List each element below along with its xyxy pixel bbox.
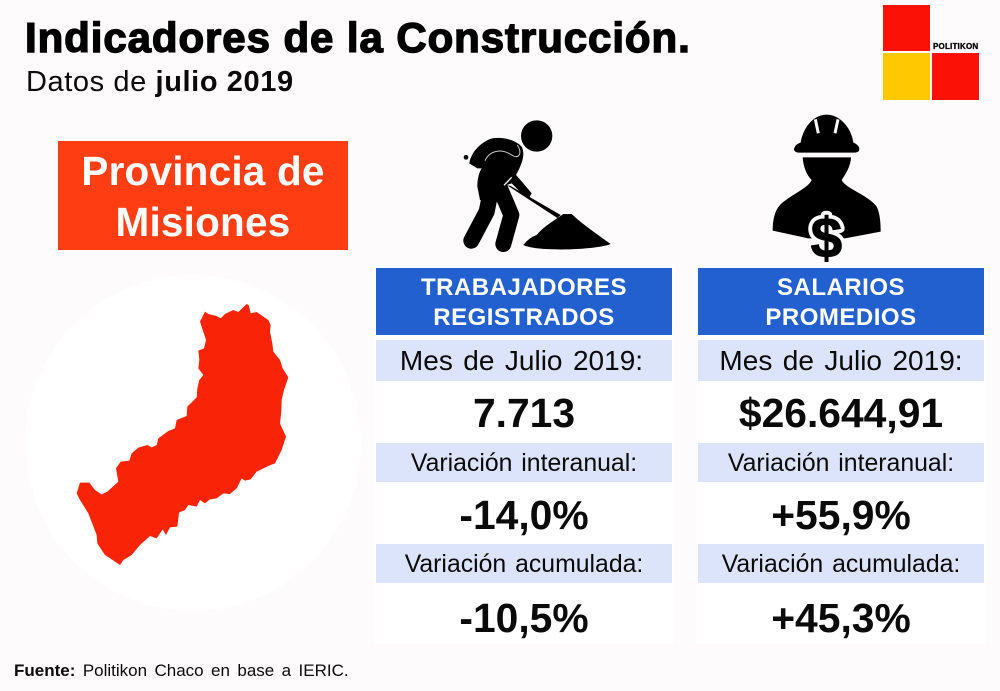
icon: worker shoveling <box>463 120 610 252</box>
panel: salarios promedios <box>698 268 984 642</box>
icon: dollar sign: $ <box>811 207 842 270</box>
label: acumulada <box>376 544 672 583</box>
title: Indicadores de la Construcción. <box>25 14 691 61</box>
label: mes: Mes de Julio 2019: <box>719 345 963 376</box>
province label: Provincia de <box>81 148 325 194</box>
icon: dollar sign: $ <box>811 207 842 270</box>
label: mes <box>376 340 672 381</box>
map: Misiones <box>77 304 288 565</box>
label: acumulada: Variación acumulada: <box>405 551 643 578</box>
label: mes: Mes de Julio 2019: <box>400 345 643 376</box>
value: -14,0%: -14,0% <box>459 492 589 538</box>
heading: trabajadores <box>376 268 672 335</box>
heading: salarios: SALARIOS <box>777 274 905 301</box>
label: interanual <box>698 443 984 482</box>
province label: Misiones <box>116 199 290 245</box>
logo: Politikon <box>883 5 979 100</box>
value: $26.644,91: $26.644,91 <box>739 390 943 436</box>
value: +45,3%: +45,3% <box>771 595 911 641</box>
province label <box>58 141 348 250</box>
icon: worker with dollar <box>772 114 881 270</box>
label: interanual: Variación interanual: <box>411 450 637 477</box>
source note: Fuente: Politikon Chaco en base a IERIC. <box>14 661 349 680</box>
heading: salarios <box>698 268 984 335</box>
label: mes <box>698 340 984 381</box>
value: -10,5%: -10,5% <box>459 595 589 641</box>
panel: trabajadores registrados <box>376 268 672 642</box>
heading: trabajadores: TRABAJADORES <box>421 274 627 301</box>
label: acumulada <box>698 544 984 583</box>
subtitle: Datos de julio 2019 <box>26 66 294 98</box>
label: interanual <box>376 443 672 482</box>
map circle with Misiones <box>76 304 288 565</box>
value: +55,9%: +55,9% <box>771 492 911 538</box>
heading: salarios: PROMEDIOS <box>765 304 917 331</box>
value: 7.713: 7.713 <box>473 390 575 436</box>
label: interanual: Variación interanual: <box>728 450 954 477</box>
label: acumulada: Variación acumulada: <box>722 551 960 578</box>
heading: trabajadores: REGISTRADOS <box>433 304 615 331</box>
logo: Politikon: POLITIKON <box>933 42 978 51</box>
